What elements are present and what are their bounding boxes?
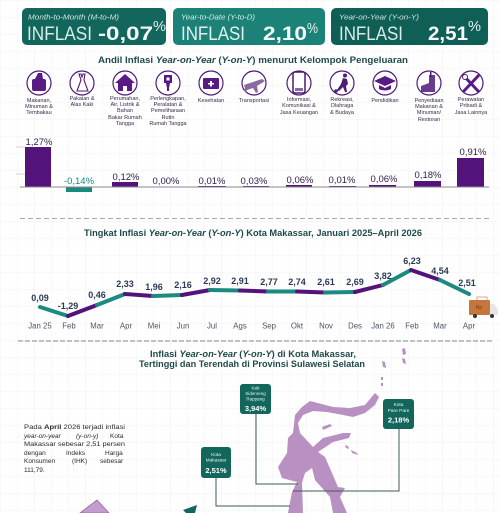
card: year-on-year inflation: INFLASI <box>339 24 403 45</box>
text block: summary paragraph: dengan <box>24 450 46 457</box>
line chart: yearly inflation: Apr <box>463 322 475 330</box>
category: information and communication: Jasa Keuangan <box>280 110 318 116</box>
text block: summary paragraph: sebesar <box>100 458 124 465</box>
category: information and communication <box>280 71 318 116</box>
line chart: yearly inflation: Des <box>348 322 362 330</box>
category: transport <box>239 71 269 104</box>
category: housing: Tangga <box>116 121 135 127</box>
card: year-on-year inflation: 2,51 <box>428 23 468 45</box>
category: household equipment: Rumah Tangga <box>149 121 188 127</box>
bar chart: contribution values: 0,06% <box>287 175 314 186</box>
bar chart: contribution values: 0,12% <box>113 172 140 183</box>
line chart: yearly inflation: Jan 25 <box>28 322 52 330</box>
line chart: yearly inflation: Feb <box>62 322 76 330</box>
text block: summary paragraph: (IHK) <box>72 458 87 465</box>
line chart: yearly inflation: 2,91 <box>231 276 249 286</box>
category: personal care: Perawatan <box>458 97 484 103</box>
card: year-to-date inflation: 2,10 <box>263 23 307 45</box>
line chart: yearly inflation: Nov <box>319 322 333 330</box>
line chart: yearly inflation: Mar <box>90 322 104 330</box>
category: household equipment <box>149 71 188 127</box>
category: recreation: Rekreasi, <box>330 97 354 103</box>
category: housing: Air, Listrik & <box>110 102 140 108</box>
category: personal care: Pribadi & <box>460 103 482 109</box>
card: month-to-month inflation <box>22 8 166 45</box>
bar chart: contribution values: 0,18% <box>415 170 442 181</box>
card: year-to-date inflation: INFLASI <box>181 24 245 45</box>
card: month-to-month inflation: Month-to-Month (M-to-M) <box>28 14 119 22</box>
bar chart: contribution values: 0,03% <box>241 176 268 187</box>
category: recreation: Olahraga <box>331 103 354 109</box>
category: food service: Minuman/ <box>417 110 442 116</box>
card: year-to-date inflation: Year-to-Date (Y-to-D) <box>181 14 255 22</box>
text block: summary paragraph: Konsumen <box>24 458 55 465</box>
card: month-to-month inflation: -0,07 <box>98 23 153 45</box>
text block: summary paragraph: (y-on-y) <box>76 433 98 440</box>
category: food: Makanan, <box>27 98 52 104</box>
line chart: yearly inflation: Apr <box>120 322 132 330</box>
line chart: yearly inflation: Mei <box>148 322 161 330</box>
heading: map title <box>139 349 365 369</box>
line chart: yearly inflation: 2,74 <box>288 277 306 287</box>
line chart: yearly inflation: 2,77 <box>260 277 278 287</box>
category: information and communication: Komunikasi & <box>282 103 316 109</box>
category: housing: Perumahan, <box>110 96 140 102</box>
category: housing: Bahan <box>117 108 133 114</box>
category: food service <box>414 71 444 123</box>
decorative shape: purple diamond <box>80 500 109 513</box>
line chart: yearly inflation: Feb <box>405 322 419 330</box>
callout: Kab Sidenreng Rappang <box>240 384 271 414</box>
callout: Kab Sidenreng Rappang: Kab <box>251 386 260 390</box>
line chart: yearly inflation: -1,29 <box>58 301 78 311</box>
category: education <box>371 71 399 104</box>
callout: Kota Makassar <box>201 447 231 478</box>
text block: summary paragraph: Harga <box>105 450 123 457</box>
text block: summary paragraph: Indeks <box>66 450 86 457</box>
line chart: yearly inflation: 2,51 <box>458 278 476 288</box>
category: food: Tembakau <box>26 110 52 116</box>
text block: summary paragraph: Pada April 2026 terjadi inflasi <box>24 424 125 431</box>
line chart: yearly inflation: Jul <box>207 322 217 330</box>
category: personal care: Jasa Lainnya <box>455 110 488 116</box>
line chart: yearly inflation <box>28 256 476 330</box>
category: clothing <box>69 71 95 108</box>
heading: line chart title: Tingkat Inflasi Year-on-Year (Y-on-Y) Kota Makassar, Januari 2025–April 2026 <box>84 228 422 238</box>
category: household equipment: Perlengkapan, <box>150 96 186 102</box>
line chart: yearly inflation: 6,23 <box>403 256 421 266</box>
category: food service: Penyediaan <box>414 98 444 104</box>
line chart: yearly inflation: 2,69 <box>346 277 364 287</box>
category: housing: Bakar Rumah <box>108 115 142 121</box>
category: food service: Restoran <box>418 117 440 123</box>
line chart: yearly inflation: 0,09 <box>31 293 49 303</box>
bar chart: contribution values: 0,91% <box>460 147 487 158</box>
category: transport: Transportasi <box>239 98 269 104</box>
line chart: yearly inflation: Jan 26 <box>371 322 395 330</box>
bar chart: contribution values: 1,27% <box>26 137 53 148</box>
category: food: Minuman & <box>25 104 53 110</box>
text block: summary paragraph: 111,79. <box>24 467 45 474</box>
line chart: yearly inflation: Okt <box>291 322 304 330</box>
text block: summary paragraph: year-on-year <box>23 433 62 440</box>
decorative shape: teal arrow <box>183 505 197 513</box>
text block: summary paragraph: Makassar sebesar 2,51 persen <box>24 441 125 448</box>
callout: Kota Makassar: 2,51% <box>205 466 227 475</box>
line chart: yearly inflation: 2,61 <box>317 277 335 287</box>
category: clothing: Pakaian & <box>69 96 95 102</box>
card: year-on-year inflation: Year-on-Year (Y-on-Y) <box>339 14 419 22</box>
card: month-to-month inflation: INFLASI <box>27 24 92 45</box>
line chart: yearly inflation: 2,92 <box>203 276 221 286</box>
line chart: yearly inflation: Sep <box>262 322 277 330</box>
category: food service: Makanan & <box>415 104 443 110</box>
callout: Kota Pare Pare <box>383 399 414 429</box>
card: year-to-date inflation: % <box>307 20 318 37</box>
line chart: yearly inflation: 1,96 <box>145 282 163 292</box>
bar chart: contribution values <box>16 137 489 192</box>
heading: map title: Tertinggi dan Terendah di Provinsi Sulawesi Selatan <box>139 359 365 369</box>
line chart: yearly inflation: Mar <box>433 322 447 330</box>
category: personal care <box>455 71 488 116</box>
category: food <box>25 71 53 116</box>
category: clothing: Alas Kaki <box>71 102 93 108</box>
category: housing <box>108 71 142 127</box>
card: year-on-year inflation: % <box>468 18 481 35</box>
callout: Kab Sidenreng Rappang: Sidenreng <box>245 391 266 396</box>
category icons and labels <box>25 71 488 127</box>
category: household equipment: Rutin <box>162 115 174 121</box>
callout: Kab Sidenreng Rappang: 3,94% <box>245 404 266 413</box>
line chart: yearly inflation: 2,16 <box>174 280 192 290</box>
bar chart: contribution values: 0,01% <box>329 175 356 186</box>
callout: Kota Makassar: Kota <box>211 452 221 458</box>
line chart: yearly inflation: Ags <box>233 322 247 330</box>
card: year-on-year inflation <box>331 8 488 45</box>
line chart: yearly inflation: 2,33 <box>116 279 134 289</box>
bar chart: contribution values: 0,00% <box>153 176 180 187</box>
category: recreation: & Budaya <box>330 110 355 116</box>
category: health: Kesehatan <box>198 98 224 104</box>
callout: Kota Pare Pare: 2,18% <box>388 416 409 424</box>
text block: summary paragraph <box>23 424 125 474</box>
map: South Sulawesi <box>278 348 406 513</box>
bar chart: contribution values: 0,01% <box>199 176 226 187</box>
category: education: Pendidikan <box>371 98 399 104</box>
line chart: yearly inflation: Jun <box>177 322 189 330</box>
category: information and communication: Informasi, <box>287 97 312 103</box>
category: household equipment: Peralatan & <box>154 102 183 108</box>
callout: Kota Pare Pare: Kota <box>394 402 404 408</box>
line chart: yearly inflation: 3,82 <box>374 271 392 281</box>
callout: Kota Pare Pare: Pare Pare <box>388 408 410 414</box>
category: health <box>198 71 224 104</box>
text block: summary paragraph: Kota <box>110 433 124 440</box>
category: household equipment: Pemeliharaan <box>151 108 185 114</box>
connector lines <box>216 414 399 506</box>
heading: map title: Inflasi Year-on-Year (Y-on-Y) di Kota Makassar, <box>150 349 356 359</box>
category: recreation <box>330 71 355 116</box>
line chart: yearly inflation: 4,54 <box>431 266 449 276</box>
callout: Kab Sidenreng Rappang: Rappang <box>246 396 265 402</box>
card: year-to-date inflation <box>173 8 325 45</box>
icon: delivery truck: Rp <box>476 305 482 311</box>
icon: delivery truck <box>469 297 498 318</box>
bar chart: contribution values: 0,06% <box>371 174 398 185</box>
line chart: yearly inflation: 0,46 <box>88 290 106 300</box>
card: month-to-month inflation: % <box>153 18 166 35</box>
bar chart: contribution values: -0,14% <box>64 176 95 187</box>
callout: Kota Makassar: Makassar <box>206 458 227 464</box>
heading: contribution by expenditure group: Andil Inflasi Year-on-Year (Y-on-Y) menurut Kelompok Pengeluaran <box>98 55 408 66</box>
